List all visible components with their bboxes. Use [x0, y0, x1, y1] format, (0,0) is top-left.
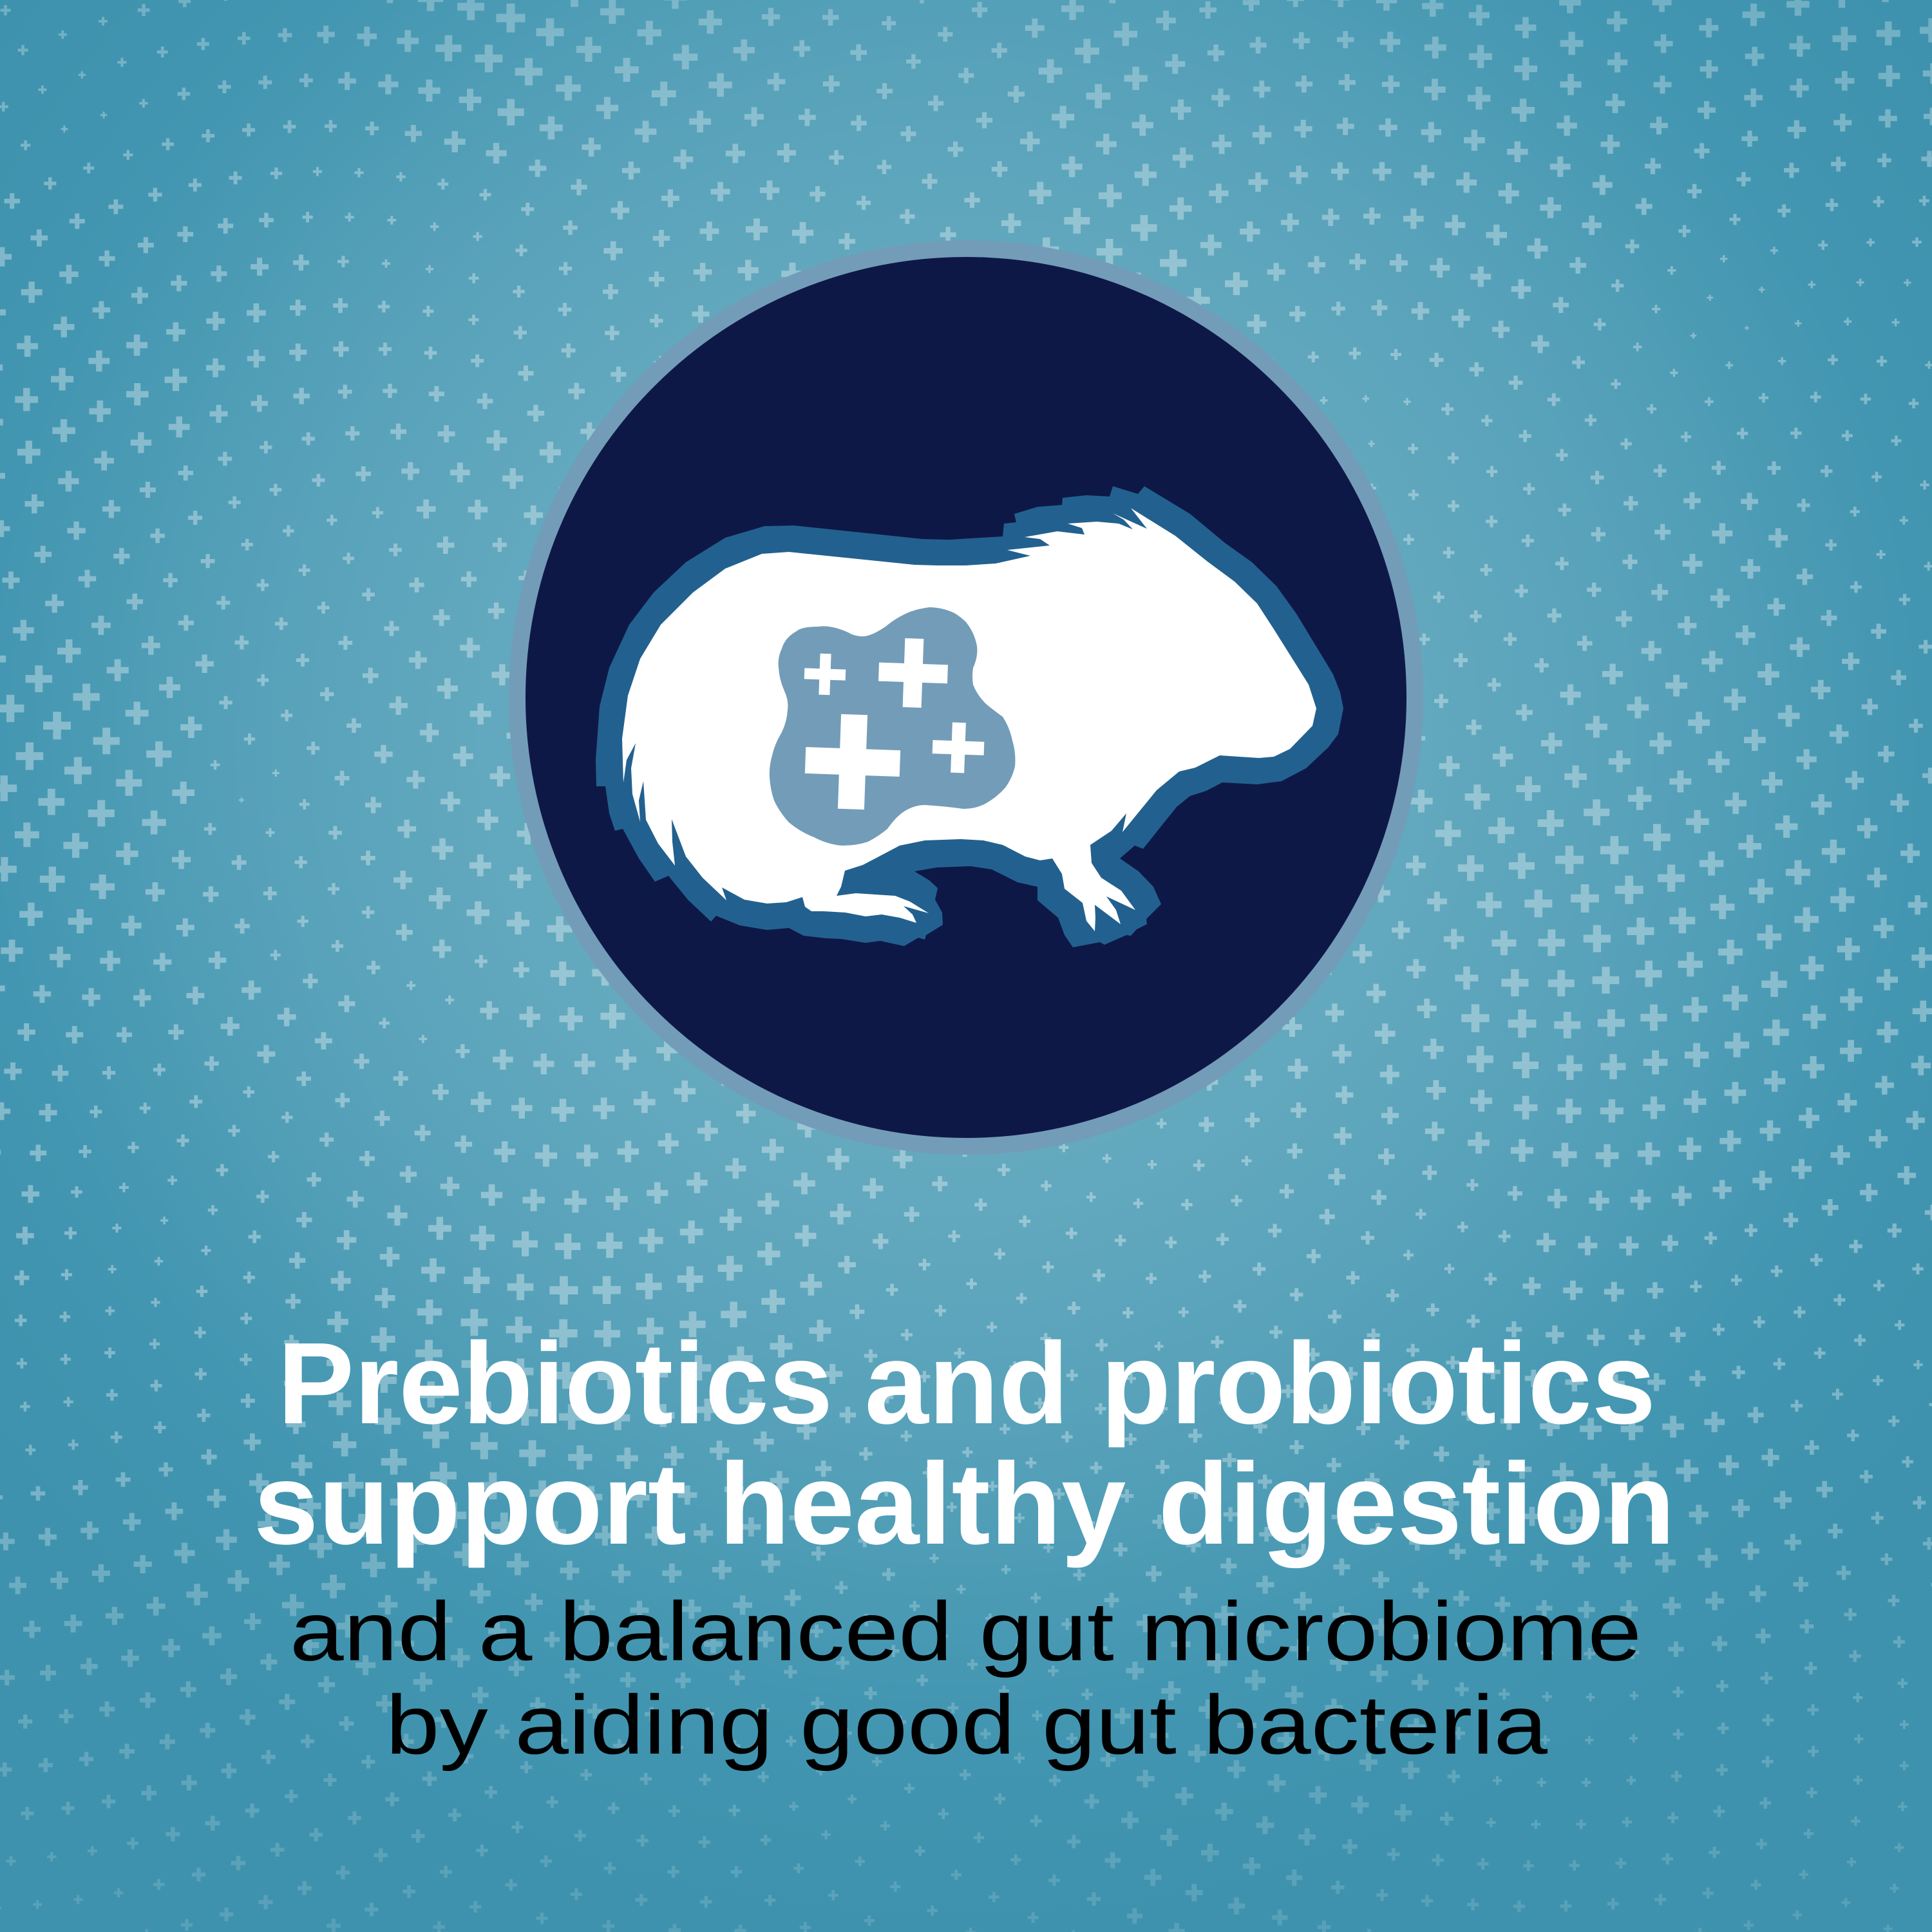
badge outer ring — [509, 240, 1423, 1155]
heading — [254, 1319, 1675, 1569]
guinea pig blue outline — [596, 486, 1343, 947]
badge: guinea pig circle — [509, 240, 1423, 1155]
guinea pig white body — [622, 508, 1316, 931]
small plus, lower right — [932, 722, 985, 773]
subheading line 2: by aiding good gut bacteria — [386, 1678, 1548, 1772]
large plus, lower left — [804, 713, 902, 811]
heading line 1: Prebiotics and probiotics — [278, 1319, 1656, 1448]
medium plus, upper right — [878, 638, 949, 708]
subheading — [290, 1584, 1642, 1772]
gut blob — [770, 607, 1015, 846]
heading line 2: support healthy digestion — [254, 1439, 1675, 1569]
small plus, upper left — [804, 653, 846, 696]
icon: guinea pig — [596, 486, 1343, 947]
badge dark circle — [526, 257, 1406, 1138]
subheading line 1: and a balanced gut microbiome — [290, 1584, 1642, 1678]
